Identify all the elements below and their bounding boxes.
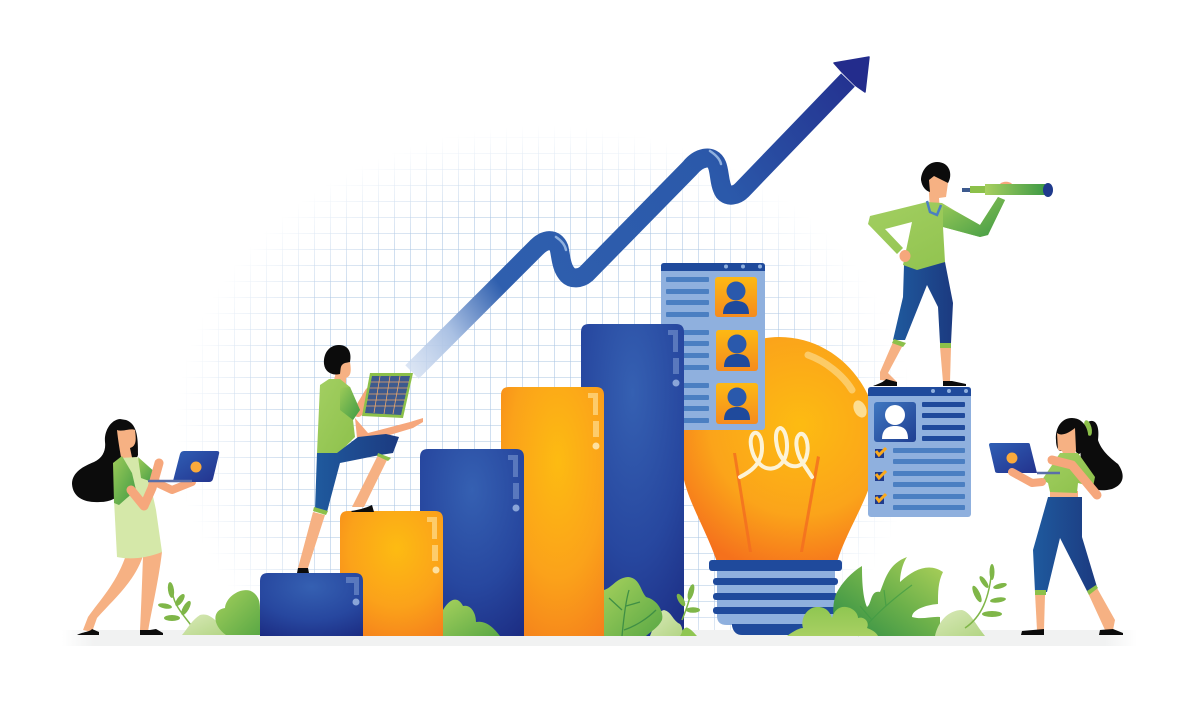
head [324,345,351,384]
background grid [186,134,899,630]
broad leaf [604,577,662,636]
ponytail [1080,421,1123,490]
sprig [682,590,691,620]
collar [927,201,941,215]
bush in front of bulb [787,607,878,636]
shoes [297,505,374,573]
shoes [873,379,966,386]
filament coil [740,428,812,477]
bar 2 [340,511,443,636]
cuffs [313,453,391,515]
filament supports [733,453,820,552]
arms [131,463,192,506]
pants [315,434,399,512]
hair band [1083,419,1093,437]
laptop [989,443,1060,473]
jacket [113,456,157,505]
bar 1 [260,573,363,636]
hair [1056,418,1088,455]
legs [83,552,162,632]
legs [298,455,388,568]
front arm [355,418,423,440]
arms [1012,460,1097,495]
shoes [77,629,163,635]
laptop [148,451,219,482]
pants [893,262,953,343]
portrait 3 [716,383,758,424]
pale bush [650,610,682,636]
sprig [158,582,193,628]
cuffs [1035,585,1098,595]
cuffs [892,339,951,348]
sleeve [340,387,360,420]
hand on hip [900,250,910,262]
plants between bars [443,600,500,636]
bar 3 [420,449,524,636]
light bulb [682,337,878,635]
checkboxes [875,448,886,504]
small bush [678,627,697,636]
bar 4 [501,387,604,636]
monstera leaf [833,557,943,636]
dress [114,457,162,558]
shoes [1021,629,1123,635]
shirt [868,197,1005,270]
plants at tall bar [604,577,700,636]
back arm [358,392,370,412]
ground shadow [62,630,1137,646]
plants right [935,564,1007,636]
illustration [72,56,1123,646]
face and neck [117,429,136,462]
resume document with checklist [868,387,971,517]
hair [72,419,138,502]
pants [1033,497,1097,593]
leaf veins [609,590,656,636]
legs [880,342,951,382]
portrait 1 [715,277,757,317]
woman with laptop, left [72,419,219,635]
portrait 2 [716,330,758,371]
tablet [362,373,413,418]
profile document with portraits [661,263,765,430]
bulb base [709,560,842,635]
shirt [317,379,360,455]
bar 5 [581,324,684,636]
woman with laptop, right [989,418,1123,635]
waist [1050,491,1078,497]
legs [1035,588,1115,630]
plants left [158,582,260,635]
resume photo [874,402,916,442]
man with telescope [868,162,1053,386]
bulb highlights [808,355,869,420]
telescope [962,182,1053,197]
crest highlights [556,151,721,250]
growth arrow [412,57,869,372]
man climbing with tablet [297,345,423,573]
top [1042,453,1095,493]
sleeve shading [943,197,1005,237]
face [1057,428,1076,458]
head [921,162,950,212]
